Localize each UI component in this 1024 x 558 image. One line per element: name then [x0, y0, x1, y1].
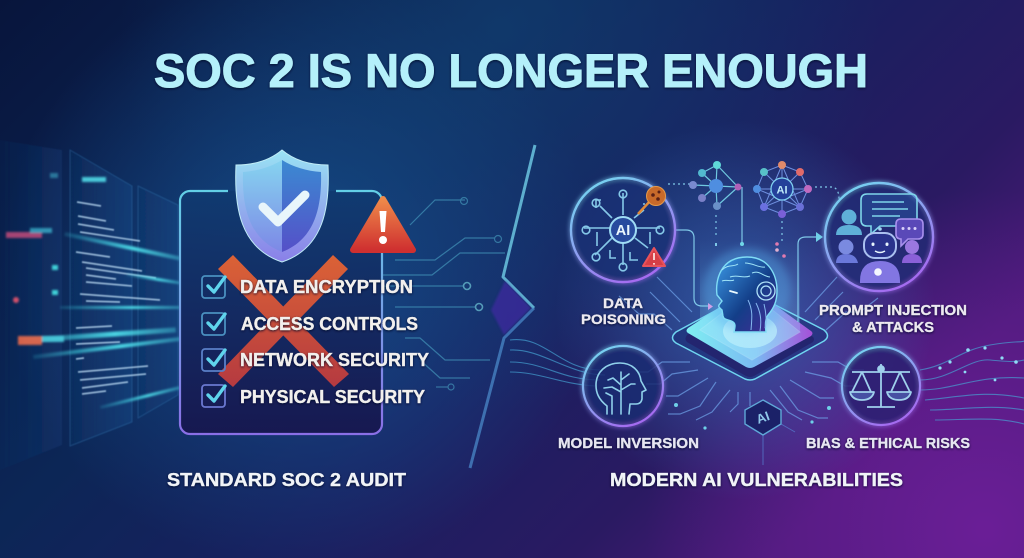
title: SOC 2 IS NO LONGER ENOUGH	[154, 44, 868, 97]
connector dots	[674, 403, 831, 430]
label: MODEL INVERSION	[558, 436, 699, 452]
icon: AI hex chip: AI	[754, 408, 772, 427]
panel: data poisoning	[571, 178, 675, 327]
circuit traces around central chip	[619, 277, 878, 420]
panel: model inversion	[558, 346, 699, 452]
icon: brain in head	[596, 363, 646, 414]
checklist labels: NETWORK SECURITY	[240, 350, 429, 370]
icon: AI network node two: AI	[776, 184, 788, 196]
icon: poison spot	[638, 186, 666, 214]
server racks with code screens	[0, 140, 180, 470]
icon: speech bubbles	[861, 194, 923, 246]
icon: warning triangle	[353, 199, 413, 250]
platform	[672, 240, 828, 380]
label: & ATTACKS	[852, 320, 934, 336]
checklist labels: PHYSICAL SECURITY	[240, 387, 425, 407]
icon: red X	[218, 255, 349, 387]
light beams	[23, 232, 180, 409]
label: POISONING	[581, 311, 666, 327]
label	[581, 295, 666, 327]
connectors between nodes	[668, 184, 839, 322]
icon: scales of justice	[850, 364, 911, 407]
checklist rows	[202, 276, 429, 407]
icon: AI hex chip	[745, 400, 795, 465]
checklist card	[180, 191, 382, 434]
checklist labels: ACCESS CONTROLS	[241, 314, 418, 334]
icon: small warning	[643, 248, 665, 266]
label: PROMPT INJECTION	[819, 303, 967, 319]
panel: standard SOC 2 audit	[180, 150, 429, 434]
circuit traces left	[382, 198, 505, 390]
icon: AI chip circuit	[582, 190, 664, 271]
caption: standard SOC 2 audit: STANDARD SOC 2 AUDIT	[167, 469, 407, 490]
icon: people and robot	[836, 210, 922, 283]
checklist labels	[240, 277, 429, 407]
icon: network node one	[689, 161, 742, 210]
caption: modern AI vulnerabilities: MODERN AI VULNERABILITIES	[610, 469, 903, 490]
icon: shield with check	[236, 150, 328, 262]
checkboxes	[202, 276, 225, 407]
checklist labels: DATA ENCRYPTION	[240, 277, 413, 297]
panel: prompt injection and attacks	[819, 183, 967, 336]
head	[703, 248, 791, 332]
data waves right and left	[510, 340, 1024, 424]
icon: AI network node two	[753, 161, 812, 218]
coloured data glints	[6, 173, 106, 345]
code lines	[76, 202, 160, 394]
label: DATA	[603, 295, 643, 311]
central AI head on chip	[672, 240, 828, 380]
connector lights	[775, 242, 786, 258]
panel: data poisoning: AI	[616, 223, 630, 239]
label	[819, 303, 967, 336]
chevron divider	[470, 145, 535, 468]
label: BIAS & ETHICAL RISKS	[806, 436, 970, 452]
panel: bias and ethical risks	[806, 347, 970, 452]
